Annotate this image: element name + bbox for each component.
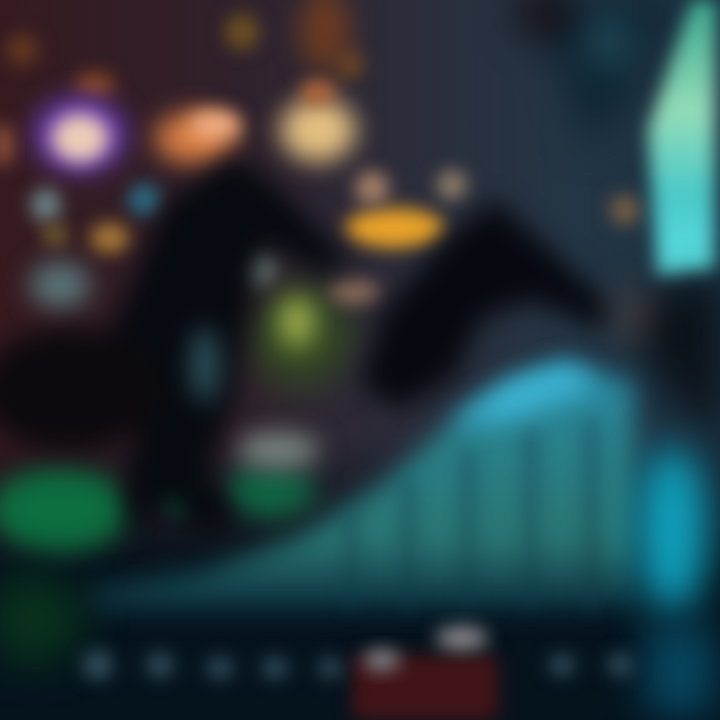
purple glow light [34,97,126,173]
cyan glow right [636,445,715,715]
silhouette: left figure [0,155,350,540]
lime glow [235,250,381,468]
dark red base [352,626,498,720]
green shapes [0,466,316,665]
cream light [280,81,356,162]
bar column stripes [345,420,597,610]
orange light [155,110,241,164]
cyan light bar [648,0,716,278]
chart bars rising [90,365,635,610]
chart highlight band [450,362,600,425]
right edge dark figure [620,280,720,440]
yellow light [345,170,467,248]
left pale column of lights [30,184,161,309]
axis label spots [83,650,633,680]
dark top-right shape [517,0,670,150]
silhouette: right figure [360,200,615,410]
lights: bokeh top [0,0,640,225]
